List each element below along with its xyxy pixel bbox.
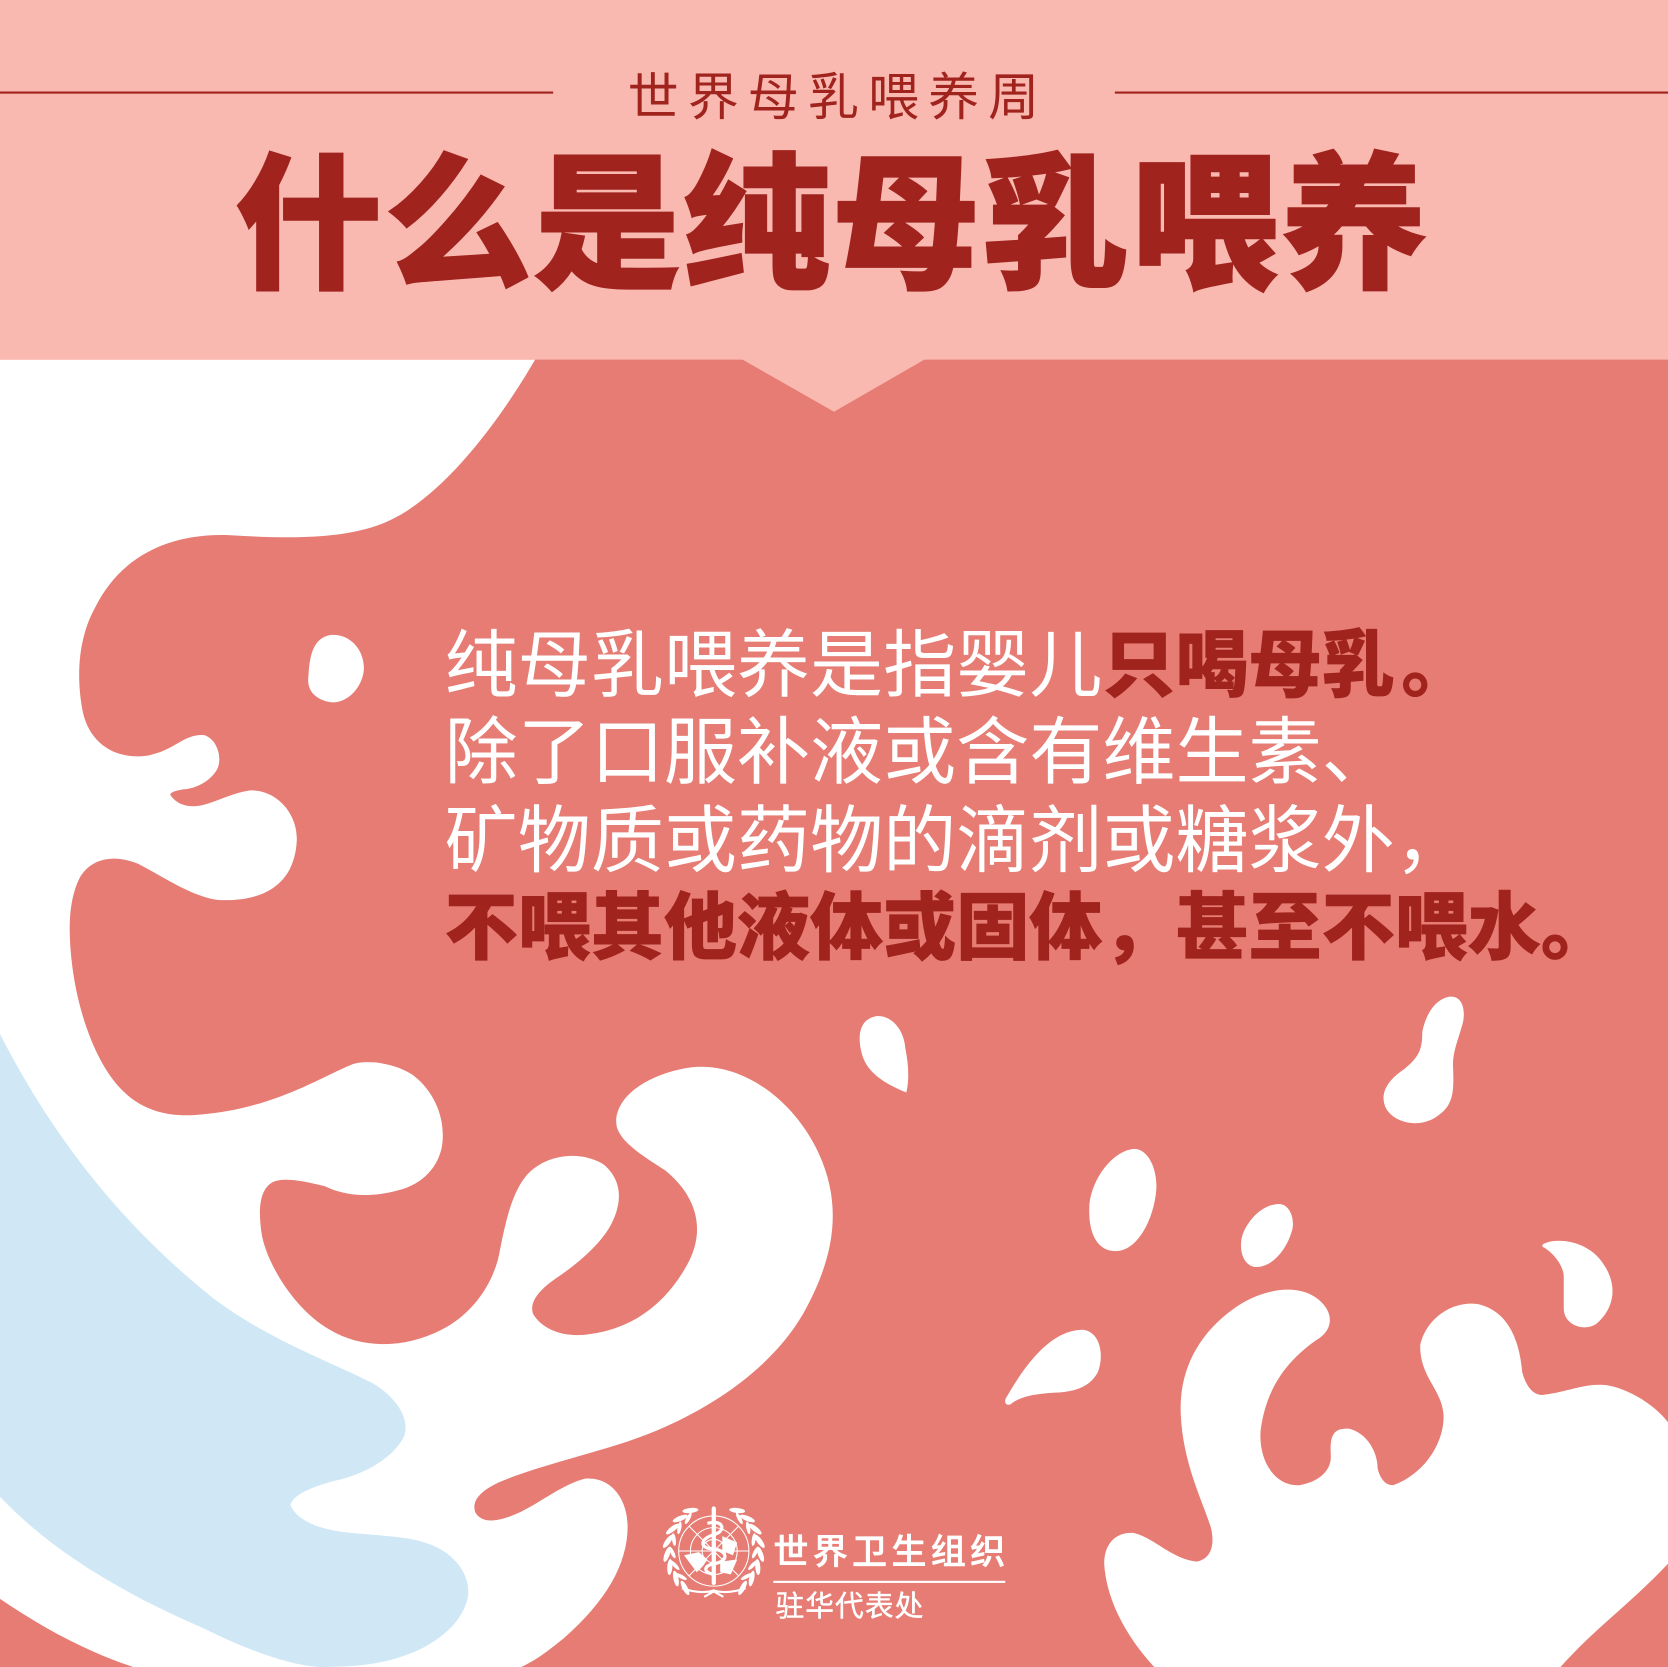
ribbon xyxy=(682,1588,746,1597)
header panel with pointer xyxy=(0,0,1668,412)
organisation name: 世界卫生组织 xyxy=(773,1524,1009,1575)
laurel left xyxy=(661,1507,699,1596)
white milk splash: bottom right xyxy=(1104,1290,1668,1667)
body text: 不喂其他液体或固体，甚至不喂水。 xyxy=(445,869,1614,975)
globe xyxy=(679,1516,749,1586)
staff xyxy=(712,1506,716,1585)
body text xyxy=(445,606,1614,975)
line 1: 纯母乳喂养是指婴儿只喝母乳。 xyxy=(445,606,1474,712)
white milk splash: left xyxy=(0,360,833,1667)
continents xyxy=(684,1536,737,1574)
light blue milk wave xyxy=(0,1034,468,1667)
header rule right xyxy=(1115,92,1668,94)
organisation rule xyxy=(773,1581,1005,1583)
salmon corner bottom left xyxy=(0,1599,133,1667)
WHO emblem xyxy=(661,1506,766,1597)
body text: 除了口服补液或含有维生素、 xyxy=(445,694,1395,800)
title: 什么是纯母乳喂养 xyxy=(235,108,1430,320)
milk drops xyxy=(308,635,1613,1405)
body text: 矿物质或药物的滴剂或糖浆外， xyxy=(445,782,1468,888)
laurel right xyxy=(729,1507,766,1596)
subtitle: 世界母乳喂养周 xyxy=(628,56,1048,130)
snake xyxy=(703,1522,725,1574)
header rule left xyxy=(0,92,553,94)
representative office: 驻华代表处 xyxy=(775,1584,924,1625)
